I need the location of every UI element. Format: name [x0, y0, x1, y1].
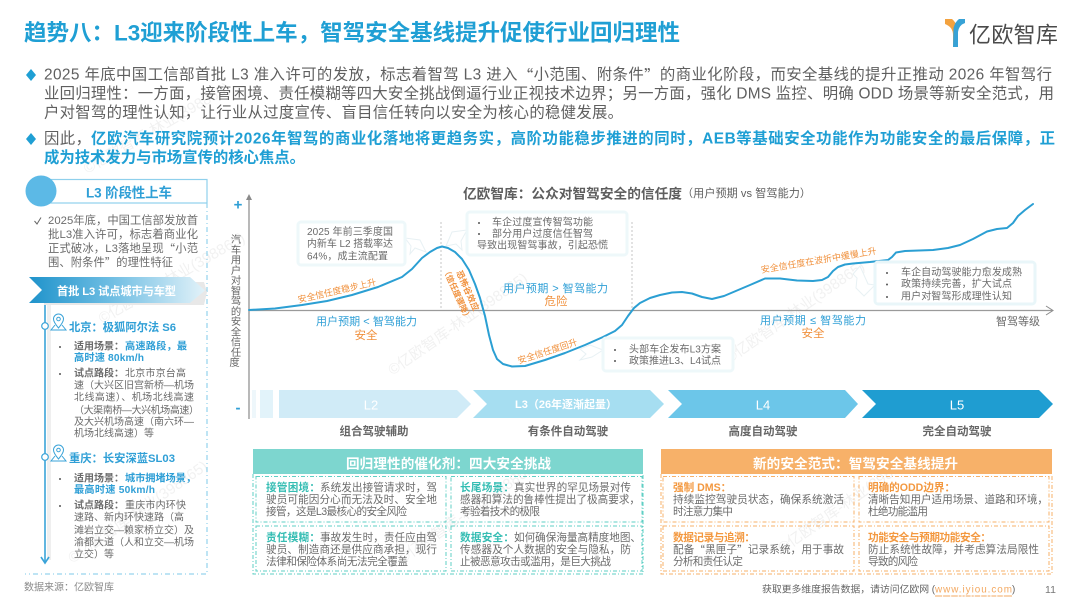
icon: location pin — [51, 445, 66, 461]
city: Chongqing: 速路、新内环快速路（高 — [74, 510, 184, 524]
banner: pilot cities and models: 首批 L3 试点城市与车型 — [57, 284, 176, 298]
curve annotations: 安全信任度在波折中缓慢上升 — [760, 245, 877, 275]
challenge: takeover: 接管困境： — [266, 481, 320, 494]
footer: www.iyiou.com — [934, 584, 1012, 596]
challenge: takeover: 系统发出接管请求时，驾 — [320, 481, 437, 494]
text block: intro paragraph 2: 因此， — [44, 130, 91, 148]
y axis: 全 — [231, 325, 242, 338]
banner: pilot cities and models — [29, 277, 207, 305]
trust curve — [249, 204, 1033, 366]
paradigm: DMS: 持续监控驾驶员状态，确保系统激活 — [673, 493, 844, 506]
callout: maturity: 政策持续完善，扩大试点 — [901, 277, 1012, 290]
challenge: long tail: 感器和算法的鲁棒性提出了极高要求， — [460, 493, 640, 506]
city: Beijing: 北京：极狐阿尔法 S6 — [69, 320, 176, 334]
callout: maturity — [875, 262, 1035, 304]
curve annotations: 恐怖谷效应 — [454, 269, 481, 313]
callout: over-promotion: 车企过度宣传智驾功能 — [492, 216, 593, 228]
y axis: 度 — [229, 356, 240, 368]
x axis — [249, 306, 1053, 328]
panel: four safety challenges — [253, 449, 643, 574]
paradigm: functional safety: 导致的风险 — [868, 555, 918, 568]
city: Chongqing: 渝都大道（人和立交—机场 — [74, 536, 194, 548]
footer — [762, 582, 1015, 596]
y axis: 智 — [231, 284, 241, 297]
city: Beijing: 及大兴机场高速（南六环— — [74, 415, 194, 428]
y axis: - — [236, 400, 240, 416]
level L2 — [279, 390, 471, 438]
level L4: 高度自动驾驶 — [728, 424, 798, 438]
icon: location pin — [51, 314, 66, 330]
challenge: takeover: 驶员可能因分心而无法及时、安全地 — [266, 493, 437, 506]
paradigm: data recording: 配备“黑匣子”记录系统，用于事故 — [673, 542, 844, 558]
city: Beijing — [42, 314, 199, 440]
chart title: 亿欧智库：公众对智驾安全的信任度 — [463, 186, 682, 202]
text block: intro paragraph 2: 亿欧汽车研究院预计2026年智驾的商业化落地将更趋务实，高阶功能稳步推进的同时，AEB等基础安全功能作为功能安全的最后保障，正 — [91, 128, 1055, 148]
paradigm: data recording — [673, 531, 844, 568]
chart title: （用户预期 vs 智驾能力） — [682, 186, 811, 200]
challenge: data security: 数据安全： — [460, 531, 514, 544]
panel: L3 stage on the road — [25, 176, 207, 574]
challenge: liability — [266, 531, 437, 568]
city: Chongqing: 立交）等 — [74, 548, 114, 560]
text block: L3 summary — [34, 213, 198, 271]
paradigm: DMS: 时注意力集中 — [673, 505, 733, 518]
chart: public trust in autonomous driving safety — [0, 0, 1053, 419]
city: Chongqing: 适用场景： — [74, 472, 124, 484]
text block: L3 summary: 批L3准入许可，标志着商业化 — [48, 227, 198, 241]
chart title — [463, 186, 811, 202]
callout: over-promotion — [467, 212, 627, 255]
panel heading — [253, 449, 643, 474]
page number: 11 — [1045, 584, 1056, 596]
challenge: liability: 法律和保险体系尚无法完全覆盖 — [266, 555, 408, 568]
panel heading — [26, 176, 207, 206]
city: Beijing: 机场北线高速）等 — [74, 426, 154, 440]
city: Beijing: 速（大兴区旧宫新桥—机场 — [74, 378, 194, 392]
logo: 亿欧智库 — [969, 22, 1058, 48]
watermarks: ©亿欧智库-林业(398865) — [95, 229, 248, 327]
level L2: 组合驾驶辅助 — [340, 424, 408, 438]
footer: 获取更多维度报告数据，请访问亿欧网 ( — [762, 582, 936, 596]
text block: L3 summary: 正式破冰，L3落地呈现“小范 — [48, 241, 198, 257]
zone label: danger: 用户预期 > 智驾能力 — [503, 281, 608, 295]
challenge: long tail: 长尾场景： — [460, 481, 514, 494]
level L2: L2 — [364, 398, 378, 412]
callout: L2 penetration: 内新车 L2 搭载率达 — [307, 237, 393, 250]
dotted dividers — [441, 222, 632, 310]
zone label: safe right: 用户预期 ≤ 智驾能力 — [760, 313, 866, 327]
callout: L2 penetration: 2025 年前三季度国 — [307, 225, 393, 238]
text block: L3 summary: 围、附条件”的理性特征 — [48, 255, 173, 271]
level L5: L5 — [950, 398, 964, 412]
paradigm: ODD: 明确的ODD边界： — [868, 481, 955, 494]
curve annotations: 安全信任度稳步上升 — [297, 276, 377, 305]
city: Beijing: 北线高速）、机场北线高速 — [74, 390, 194, 404]
watermarks — [65, 79, 921, 567]
zone label: safe left: 用户预期 < 智驾能力 — [316, 314, 417, 328]
challenge: long tail: 真实世界的罕见场景对传 — [514, 481, 631, 494]
challenge: takeover: 接管，这是L3最核心的安全风险 — [266, 505, 407, 518]
watermarks: ©亿欧智库-林业(398865) — [80, 79, 233, 177]
text block: L3 summary: 2025年底，中国工信部发放首 — [48, 213, 198, 227]
y axis — [0, 0, 252, 419]
zone label: safe right — [760, 313, 866, 340]
y axis: 户 — [231, 263, 241, 276]
callout: L3 rollout — [603, 338, 733, 371]
paradigm: functional safety: 防止系统性故障，并考虑算法局限性 — [868, 543, 1039, 556]
zone label: safe left — [316, 314, 417, 342]
paradigm: data recording: 数据记录与追溯： — [673, 531, 755, 544]
paradigm: ODD — [868, 481, 1048, 518]
watermarks: ©亿欧智库-林业(398865) — [722, 257, 868, 367]
y axis: 任 — [231, 345, 241, 358]
challenge: liability: 责任模糊： — [266, 531, 320, 544]
curve annotations: 安全信任度回升 — [516, 336, 579, 366]
level L3: 有条件自动驾驶 — [528, 424, 609, 438]
challenge: data security: 传感器及个人数据的安全与隐私，防 — [460, 543, 631, 556]
zone label: danger: 危险 — [544, 294, 568, 308]
level L4 — [668, 390, 858, 438]
city: Chongqing: 重庆：长安深蓝SL03 — [69, 451, 175, 465]
paradigm: DMS: 强制 DMS： — [673, 481, 731, 494]
city: Chongqing — [42, 445, 196, 560]
city: Beijing: 高时速 80km/h — [74, 351, 144, 364]
footer: ) — [1012, 584, 1015, 596]
level L5 — [862, 390, 1053, 438]
zone label: safe left: 安全 — [354, 328, 378, 342]
zone label: danger — [503, 281, 608, 308]
city: Chongqing: 最高时速 50km/h — [74, 483, 155, 496]
curve annotations — [297, 245, 877, 366]
city: Chongqing: 城市拥堵场景， — [125, 472, 196, 484]
challenge: liability: 驶员、制造商还是供应商承担，现行 — [266, 543, 437, 556]
paradigm: data recording: 分析和责任认定 — [673, 555, 743, 568]
city: Beijing: 北京市京台高 — [125, 366, 186, 380]
panel: new safety paradigm — [661, 449, 1052, 574]
y axis: 的 — [231, 304, 241, 317]
callout: L2 penetration: 64%，成主流配置 — [307, 250, 388, 262]
panel heading: L3 阶段性上车 — [86, 184, 172, 200]
callout tails — [405, 230, 875, 360]
watermarks: ©亿欧智库-林业(398865) — [775, 447, 921, 557]
source note: 数据来源：亿欧智库 — [24, 580, 114, 594]
watermarks: ©亿欧智库-林业(398865) — [395, 457, 541, 567]
city: Chongqing: 重庆市内环快 — [125, 498, 186, 512]
watermarks: ©亿欧智库-林业(398865) — [385, 269, 531, 379]
city: Chongqing: 试点路段： — [74, 498, 124, 512]
paradigm: DMS — [673, 481, 844, 518]
level arrows — [252, 390, 1053, 438]
title: 趋势八：L3迎来阶段性上车，智驾安全基线提升促使行业回归理性 — [24, 20, 680, 46]
city: Beijing: （大渠南桥—大兴机场高速） — [74, 404, 199, 416]
zone label: safe right: 安全 — [802, 326, 825, 340]
timeline arrow — [41, 304, 51, 563]
text block: intro paragraph 1 — [26, 64, 1054, 122]
panel heading: 新的安全范式：智驾安全基线提升 — [753, 456, 958, 472]
level L3 — [473, 390, 664, 438]
callout: L3 rollout: 政策推进L3、L4试点 — [629, 354, 721, 367]
callout: over-promotion: 导致出现智驾事故，引起恐慌 — [477, 238, 608, 252]
y axis: 信 — [231, 336, 241, 348]
challenge: long tail: 考验着技术的极限 — [460, 505, 540, 518]
y axis: 驾 — [231, 295, 241, 307]
challenge: data security: 止被恶意攻击或滥用，是巨大挑战 — [460, 555, 611, 568]
panel heading: 回归理性的催化剂：四大安全挑战 — [346, 456, 551, 472]
text block: intro paragraph 2 — [26, 128, 1055, 166]
challenge: liability: 事故发生时，责任应由驾 — [320, 531, 437, 544]
y axis: 对 — [231, 274, 241, 286]
panel heading — [661, 449, 1052, 474]
city: Beijing: 高速路段，最 — [125, 340, 187, 352]
callout: maturity: 用户对智驾形成理性认知 — [901, 290, 1012, 302]
y axis: + — [234, 196, 243, 214]
level L4: L4 — [756, 398, 770, 412]
logo — [945, 19, 1058, 48]
y axis: 用 — [231, 255, 241, 266]
text block: intro paragraph 1: 业回归理性：一方面，接管困境、责任模糊等四大安全挑战倒逼行业正视技术边界；另一方面，强化 DMS 监控、明确 ODD 场景等新安全范式，用 — [44, 84, 1054, 102]
callout: L2 penetration — [298, 222, 405, 265]
text block: intro paragraph 1: 2025 年底中国工信部首批 L3 准入许可的发放，标志着智驾 L3 进入“小范围、附条件”的商业化阶段，而安全基线的提升正推动 2026 年智驾行 — [44, 64, 1052, 86]
curve annotations: （信任度骤降） — [441, 266, 473, 322]
y axis: 汽 — [231, 232, 241, 246]
level L5: 完全自动驾驶 — [922, 424, 992, 438]
challenge: long tail — [460, 481, 640, 518]
paradigm: functional safety — [868, 531, 1039, 568]
text block: intro paragraph 2: 成为技术发力与市场宣传的核心焦点。 — [44, 148, 305, 166]
city: Beijing: 适用场景： — [74, 340, 124, 352]
watermarks: ©亿欧智库-林业(398865) — [65, 457, 211, 567]
city: Beijing: 试点路段： — [74, 366, 124, 380]
paradigm: ODD: 清晰告知用户适用场景、道路和环境， — [868, 493, 1048, 506]
text block: intro paragraph 1: 户对智驾的理性认知，让行业从过度宣传、盲目信任转向以安全为核心的稳健发展。 — [44, 104, 623, 122]
paradigm: ODD: 杜绝功能滥用 — [868, 505, 928, 518]
callout: L3 rollout: 头部车企发布L3方案 — [629, 342, 721, 356]
challenge: takeover — [266, 481, 437, 518]
challenge: data security — [460, 531, 641, 568]
callout: over-promotion: 部分用户过度信任智驾 — [492, 227, 593, 240]
paradigm: functional safety: 功能安全与预期功能安全： — [868, 531, 991, 544]
city: Chongqing: 滩岩立交—赖家桥立交）及 — [74, 524, 194, 536]
callout: maturity: 车企自动驾驶能力愈发成熟 — [901, 266, 1022, 278]
level L3: L3（26年逐渐起量） — [515, 397, 617, 411]
y axis: 车 — [231, 243, 241, 256]
challenge: data security: 如何确保海量高精度地图、 — [514, 531, 641, 544]
y axis: 安 — [231, 314, 241, 328]
x axis: 智驾等级 — [996, 314, 1040, 328]
